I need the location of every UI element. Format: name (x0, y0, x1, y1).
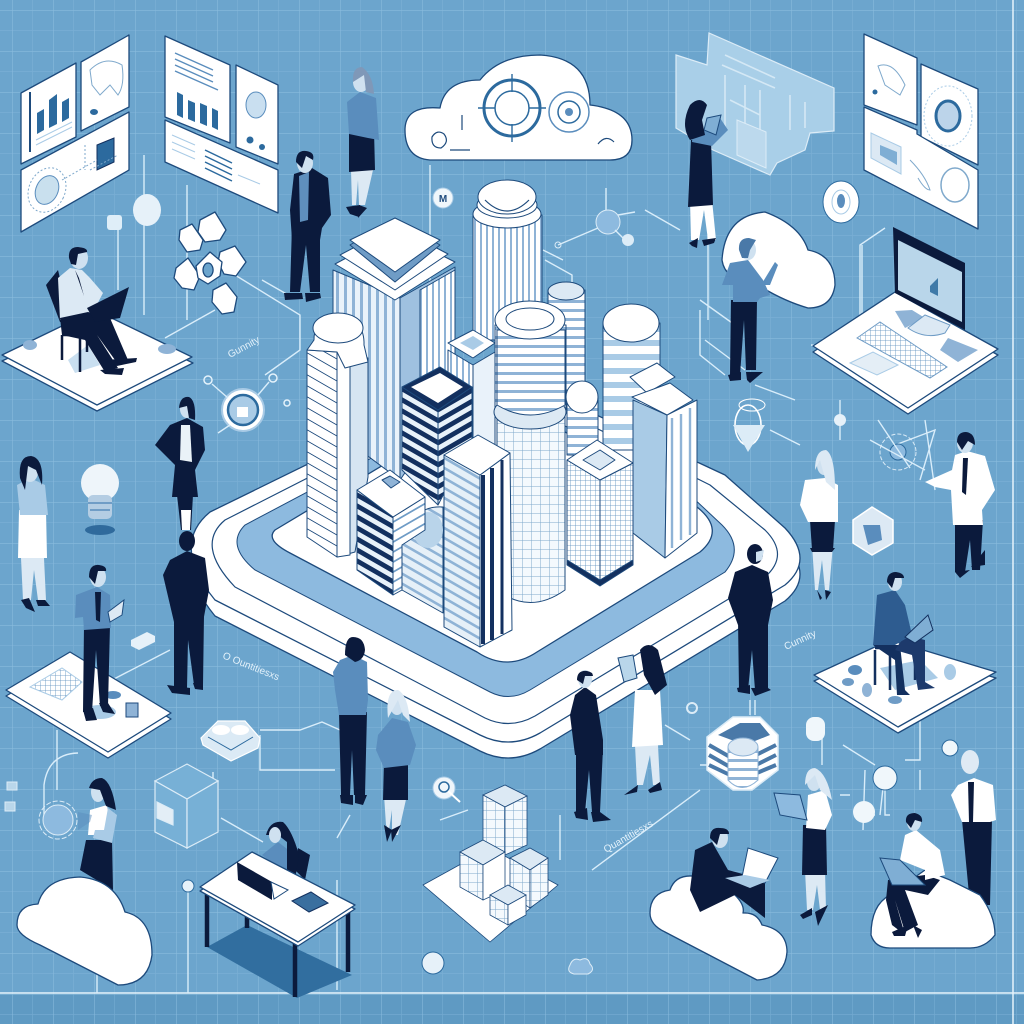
person: man on cloud with laptop (690, 828, 778, 918)
blue band (237, 390, 734, 697)
cloud: bottom center (650, 876, 787, 980)
desk (200, 852, 355, 997)
platform top (191, 370, 800, 742)
small back tower (448, 330, 495, 450)
icon: magnifier node (433, 777, 460, 802)
icon: holographic gear (39, 801, 77, 839)
cloud: behind standing man (722, 212, 835, 308)
dark building (402, 367, 472, 505)
person: seated man on lower right platform (873, 572, 935, 695)
panel: circuit (21, 112, 129, 232)
label: scribble bottom: Quantitiesxs (602, 819, 655, 856)
icon: hex cube (853, 507, 893, 555)
person: woman in white skirt (17, 456, 50, 612)
hexagon icon cluster (174, 212, 246, 314)
icon: target ring (549, 92, 589, 132)
icon: cloud node (569, 959, 593, 974)
left tower (307, 313, 368, 557)
panel: map (81, 35, 129, 131)
cloud: bottom left (17, 877, 152, 985)
person: woman at desk (262, 822, 310, 880)
platform: top left (2, 310, 193, 411)
icon: shield hologram (733, 399, 765, 452)
person: man from behind (163, 531, 209, 695)
icon: security lock node (204, 374, 290, 433)
panel: dial (236, 65, 278, 164)
platform: lower left (6, 652, 171, 758)
icon: small node circle (834, 414, 846, 426)
mid right grid building (567, 440, 633, 586)
person: man on cloud right (880, 813, 945, 938)
icon: search node (182, 880, 194, 892)
panel: bar chart (21, 63, 76, 164)
person: woman from behind (333, 637, 368, 805)
person: man in dark suit right (728, 544, 773, 696)
cloud: top center (405, 55, 632, 160)
person: woman with tablet lower right (774, 768, 832, 926)
laptop platform (813, 227, 998, 414)
dome building (402, 507, 443, 613)
icon: M badge (433, 188, 453, 208)
person: bald man with tie (951, 750, 996, 905)
person: man in white shirt (925, 432, 995, 578)
person: man with tablet (75, 565, 124, 721)
right tall tower (630, 363, 697, 558)
person: blonde woman right (800, 450, 838, 600)
server stack (707, 717, 778, 790)
platform: lower right (814, 640, 996, 733)
person: woman in white dress with tablet (618, 645, 667, 795)
label: community scribble left: Gunnity (226, 335, 262, 361)
platform base (191, 386, 800, 758)
icon: stacked discs (131, 632, 155, 650)
person: man at cloud with tablet (722, 238, 778, 383)
panel: network map (864, 34, 917, 125)
tall back cylinder (473, 180, 542, 340)
outer ring line (212, 380, 778, 724)
person: man in dark suit (284, 151, 331, 302)
icon: round lens badge (823, 181, 859, 223)
city buildings (307, 180, 697, 647)
icon: M badge: M (439, 194, 447, 205)
icon: network hub (555, 188, 635, 248)
small cylinder (566, 381, 598, 455)
person: woman with curly hair (685, 100, 728, 248)
inner white (272, 395, 712, 662)
label: scribble right: Cunnity (783, 628, 818, 653)
person: man in jacket from side (570, 670, 611, 822)
icon: light bulb (81, 464, 119, 535)
big back building (333, 218, 455, 480)
right cylinder (603, 304, 660, 450)
person: seated man with laptop (46, 247, 137, 375)
bottom strip (0, 993, 1024, 1024)
panel: table (165, 120, 278, 213)
screen (893, 227, 965, 330)
top right dashboard panels (864, 34, 978, 229)
icons: small square nodes (5, 782, 17, 811)
icon: globe ring (478, 74, 546, 142)
front striped building (444, 435, 512, 647)
icon: small badge (107, 215, 122, 230)
translucent holographic panel (676, 33, 834, 175)
big central cylinder (494, 301, 566, 602)
connector lines (44, 155, 935, 993)
icon: cake isometric node (201, 721, 260, 761)
label: quantities scribble: O Ountitiesxs (221, 651, 281, 683)
top left dashboard panels (21, 35, 278, 232)
icon: round badge (133, 194, 161, 226)
small striped cylinder (548, 282, 585, 390)
person: blonde woman (376, 690, 416, 842)
panel: report chart (165, 36, 230, 143)
person: woman with phone (346, 67, 379, 218)
icon: small nodes (687, 703, 958, 823)
icon: globe node (422, 952, 444, 974)
panel: device drawing (864, 107, 978, 229)
person: woman with hologram (78, 778, 117, 890)
small front building (357, 470, 425, 595)
cloud: bottom right (871, 870, 995, 948)
icon: transparent box (155, 764, 218, 848)
desk shadow (207, 925, 352, 998)
panel: radial dial (921, 64, 978, 165)
central platform (191, 370, 800, 758)
person: woman with folded arms (155, 397, 205, 530)
icon: hologram gear diagram (870, 420, 935, 490)
isometric mini city (423, 785, 558, 942)
